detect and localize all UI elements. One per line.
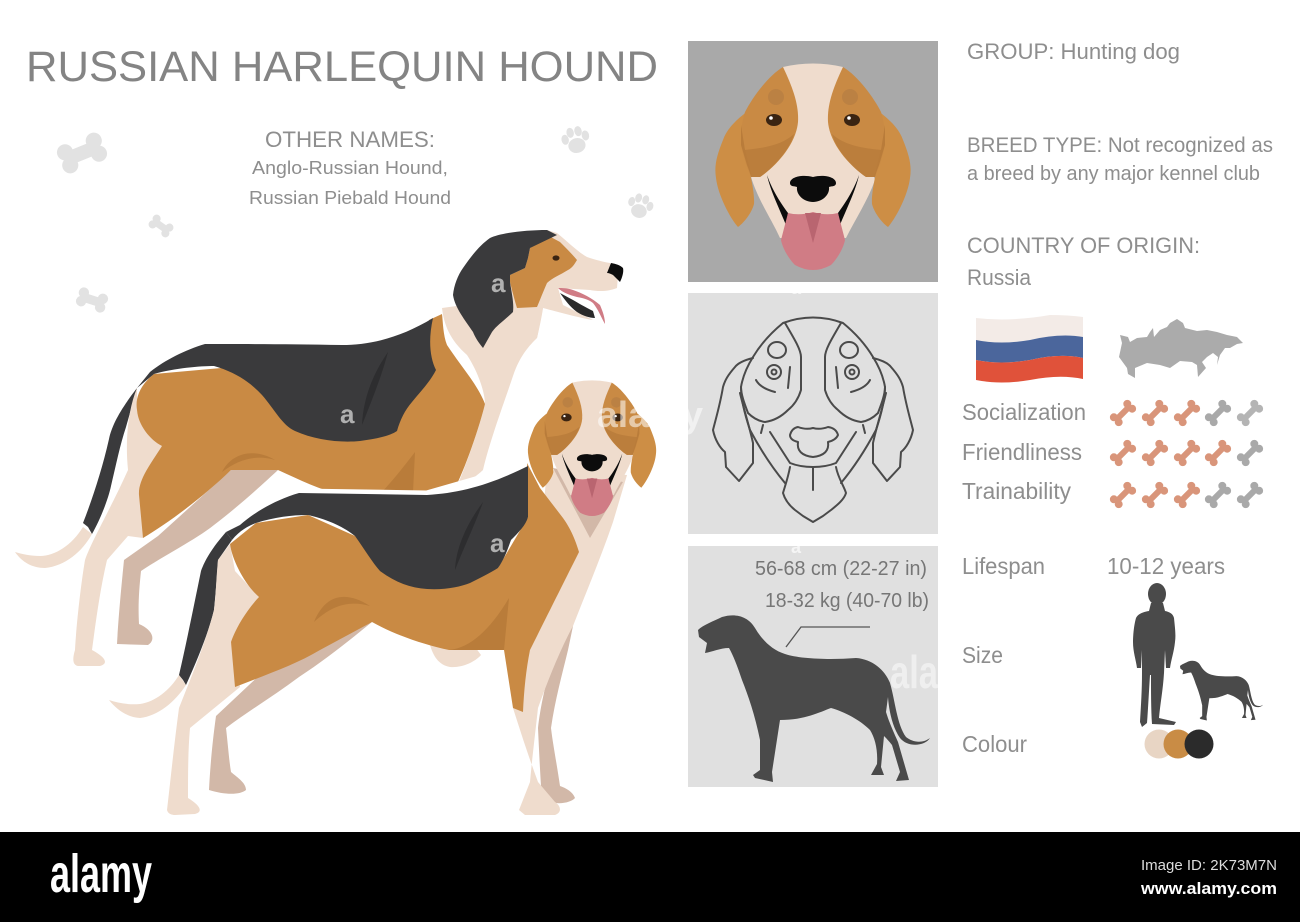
weight text: 18-32 kg (40-70 lb) bbox=[765, 590, 929, 612]
other names bbox=[249, 127, 451, 208]
line art head bbox=[713, 318, 913, 522]
head cream bbox=[500, 230, 618, 338]
info text: COUNTRY OF ORIGIN: bbox=[967, 233, 1200, 258]
rating labels: Trainability bbox=[962, 478, 1071, 504]
ear bbox=[453, 230, 557, 348]
front dog bbox=[109, 380, 656, 815]
info text: a breed by any major kennel club bbox=[967, 163, 1260, 185]
lifespan: Lifespan bbox=[962, 553, 1045, 579]
watermarks: a bbox=[791, 278, 802, 298]
other names: Russian Piebald Hound bbox=[249, 187, 451, 208]
info text bbox=[967, 39, 1273, 290]
watermarks: a bbox=[491, 268, 506, 298]
rating bones bbox=[1108, 398, 1265, 510]
info text: GROUP: Hunting dog bbox=[967, 39, 1180, 64]
other names: OTHER NAMES: bbox=[265, 127, 435, 152]
icon: russia map bbox=[1119, 319, 1243, 378]
title: RUSSIAN HARLEQUIN HOUND bbox=[26, 43, 658, 91]
lifespan: 10-12 years bbox=[1107, 553, 1225, 579]
friendliness row bbox=[1108, 438, 1265, 468]
lifespan bbox=[962, 553, 1225, 579]
leader line bbox=[786, 627, 870, 647]
watermarks: ala bbox=[890, 646, 938, 698]
rating labels: Socialization bbox=[962, 399, 1086, 425]
colour label: Colour bbox=[962, 731, 1027, 757]
watermarks: a bbox=[340, 399, 355, 429]
website: www.alamy.com bbox=[1140, 879, 1277, 898]
trainability row bbox=[1108, 480, 1265, 510]
panel: colour face bbox=[688, 41, 938, 282]
height text: 56-68 cm (22-27 in) bbox=[755, 558, 927, 580]
image id: Image ID: 2K73M7N bbox=[1141, 857, 1277, 874]
white halo around body bbox=[218, 440, 620, 687]
head tan bbox=[510, 235, 577, 308]
info text: BREED TYPE: Not recognized as bbox=[967, 134, 1273, 157]
watermarks: a bbox=[490, 528, 505, 558]
rating labels bbox=[962, 399, 1086, 504]
size label: Size bbox=[962, 642, 1003, 668]
bib shading bbox=[553, 468, 623, 538]
panel: line face bbox=[688, 293, 938, 534]
colour swatches bbox=[1144, 730, 1214, 758]
rating labels: Friendliness bbox=[962, 439, 1082, 465]
icon: russian flag bbox=[976, 315, 1083, 382]
watermarks bbox=[340, 268, 938, 698]
rear dog bbox=[15, 230, 623, 667]
panel: size silhouette bbox=[688, 546, 938, 787]
decorative bones and paws bbox=[55, 124, 656, 314]
other names: Anglo-Russian Hound, bbox=[252, 157, 448, 178]
watermarks: a bbox=[791, 537, 802, 557]
socialization row bbox=[1108, 398, 1265, 428]
footer band bbox=[0, 832, 1300, 922]
dog silhouette bbox=[698, 615, 930, 782]
icon: human and dog size comparison bbox=[1133, 583, 1263, 727]
alamy logo: alamy bbox=[50, 844, 152, 904]
info text: Russia bbox=[967, 265, 1032, 290]
watermarks: alamy bbox=[597, 394, 703, 435]
